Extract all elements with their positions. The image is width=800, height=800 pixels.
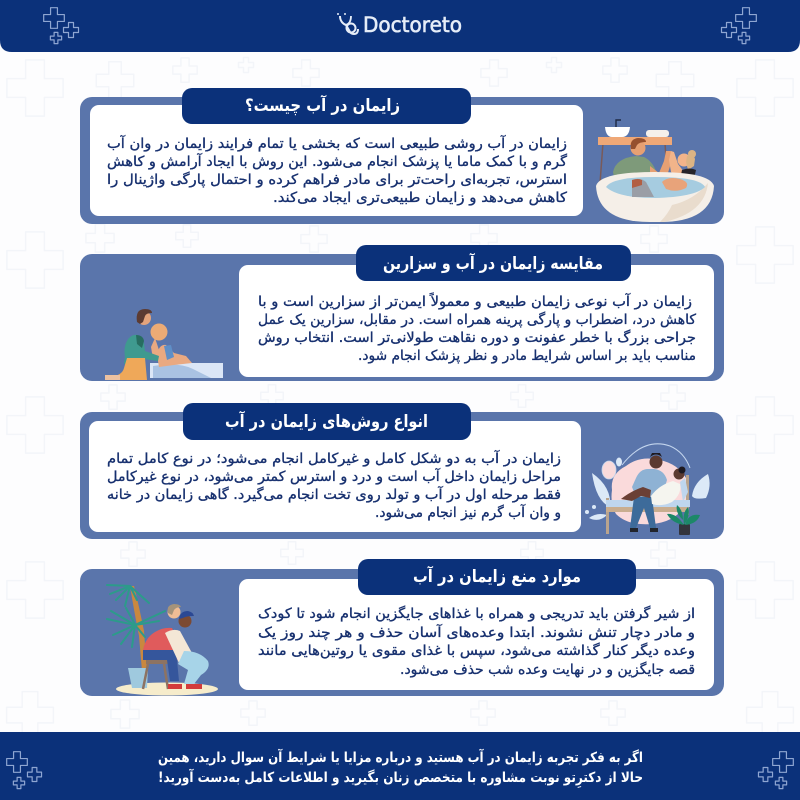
text card: زایمان در آب روشی طبیعی است که بخشی یا تمام فرایند زایمان در وان آب: [107, 135, 567, 152]
call to action text: اگر به فکر تجربه زایمان در آب هستید و درباره مزایا یا شرایط آن سوال دارید، همین: [158, 748, 643, 766]
text card: مراحل زایمان داخل آب است و درد و استرس کمتر می‌شود، در نوع غیرکامل: [107, 468, 561, 485]
call to action text: [158, 748, 643, 788]
heading pill: [183, 403, 471, 440]
icon: crosses left: [44, 8, 78, 44]
icon: crosses right: [722, 8, 756, 44]
text card: استرس، تجربه‌ای راحت‌تر برای مادر فراهم کرده و احتمال پارگی واژینال را: [107, 171, 567, 188]
illustration: couple with plant: [107, 585, 218, 696]
text card: از شیر گرفتن باید تدریجی و همراه با غذاهای جایگزین انجام شود تا کودک: [258, 605, 695, 622]
heading pill: زایمان در آب چیست؟: [245, 94, 400, 116]
heading pill: موارد منع زایمان در آب: [413, 565, 581, 587]
text card: وعده دیگر کنار گذاشته می‌شود، سپس با غذای مقوی یا روتین‌هایی مانند: [258, 642, 695, 659]
footer band: [0, 732, 800, 800]
heading pill: انواع روش‌های زایمان در آب: [225, 410, 428, 432]
text card: فقط مرحله اول در آب و تولد روی تخت انجام می‌گیرد. گاهی زایمان در خانه: [107, 486, 561, 503]
text card: زایمان در آب نوعی زایمان طبیعی و معمولاً ایمن‌تر از سزارین است و با: [258, 292, 692, 310]
call to action text: حالا از دکترِتو نوبت مشاوره با متخصص زنان بگیرید و اطلاعات کامل به‌دست آورید!: [158, 768, 643, 788]
text card: زایمان در آب به دو شکل کامل و غیرکامل انجام می‌شود؛ در نوع کامل تمام: [107, 450, 561, 467]
illustration: couple in tub: [596, 120, 714, 222]
heading pill: [356, 245, 631, 281]
text card: [90, 105, 583, 216]
panel: what is water birth: [80, 88, 724, 224]
illustration: partner supporting mother: [105, 309, 223, 380]
text card: و وان آب گرم نیز انجام می‌شود.: [375, 504, 561, 521]
text card: قصه جایگزین و در نهایت وعده شب حذف می‌شود.: [400, 661, 695, 678]
illustration: mother on bed with partner: [585, 444, 710, 535]
panel: types of water birth: [80, 403, 724, 539]
text card: گرم و با کمک ماما یا پزشک انجام می‌شود. این روش با ایجاد آرامش و کاهش: [107, 153, 567, 170]
text card: کاهش درد، اضطراب و پارگی پرینه همراه است. در مقابل، سزارین یک عمل: [258, 311, 696, 328]
panel: comparison with cesarean: [80, 245, 724, 381]
heading pill: مقایسه زایمان در آب و سزارین: [383, 252, 603, 274]
panel: contraindications: [80, 559, 724, 696]
logo: Doctoreto: [363, 13, 462, 37]
text card: و مادر دچار تنش نشوند. ابتدا وعده‌های آسان حذف و هر چند روز یک: [258, 624, 695, 641]
icon: crosses right: [758, 752, 793, 789]
text card: کاهش می‌دهد و زایمان طبیعی‌تری ایجاد می‌کند.: [273, 190, 567, 206]
text card: جراحی بزرگ با خطر عفونت و دوره نقاهت طولانی‌تر است. انتخاب روش: [258, 328, 696, 346]
header band: [0, 0, 800, 52]
text card: [89, 421, 581, 532]
icon: crosses left: [7, 752, 42, 789]
text card: مناسب باید بر اساس شرایط مادر و نظر پزشک انجام شود.: [358, 348, 696, 364]
heading pill: [358, 559, 636, 595]
heading pill: [182, 88, 471, 124]
text card: [239, 265, 714, 377]
text card: [239, 579, 714, 690]
